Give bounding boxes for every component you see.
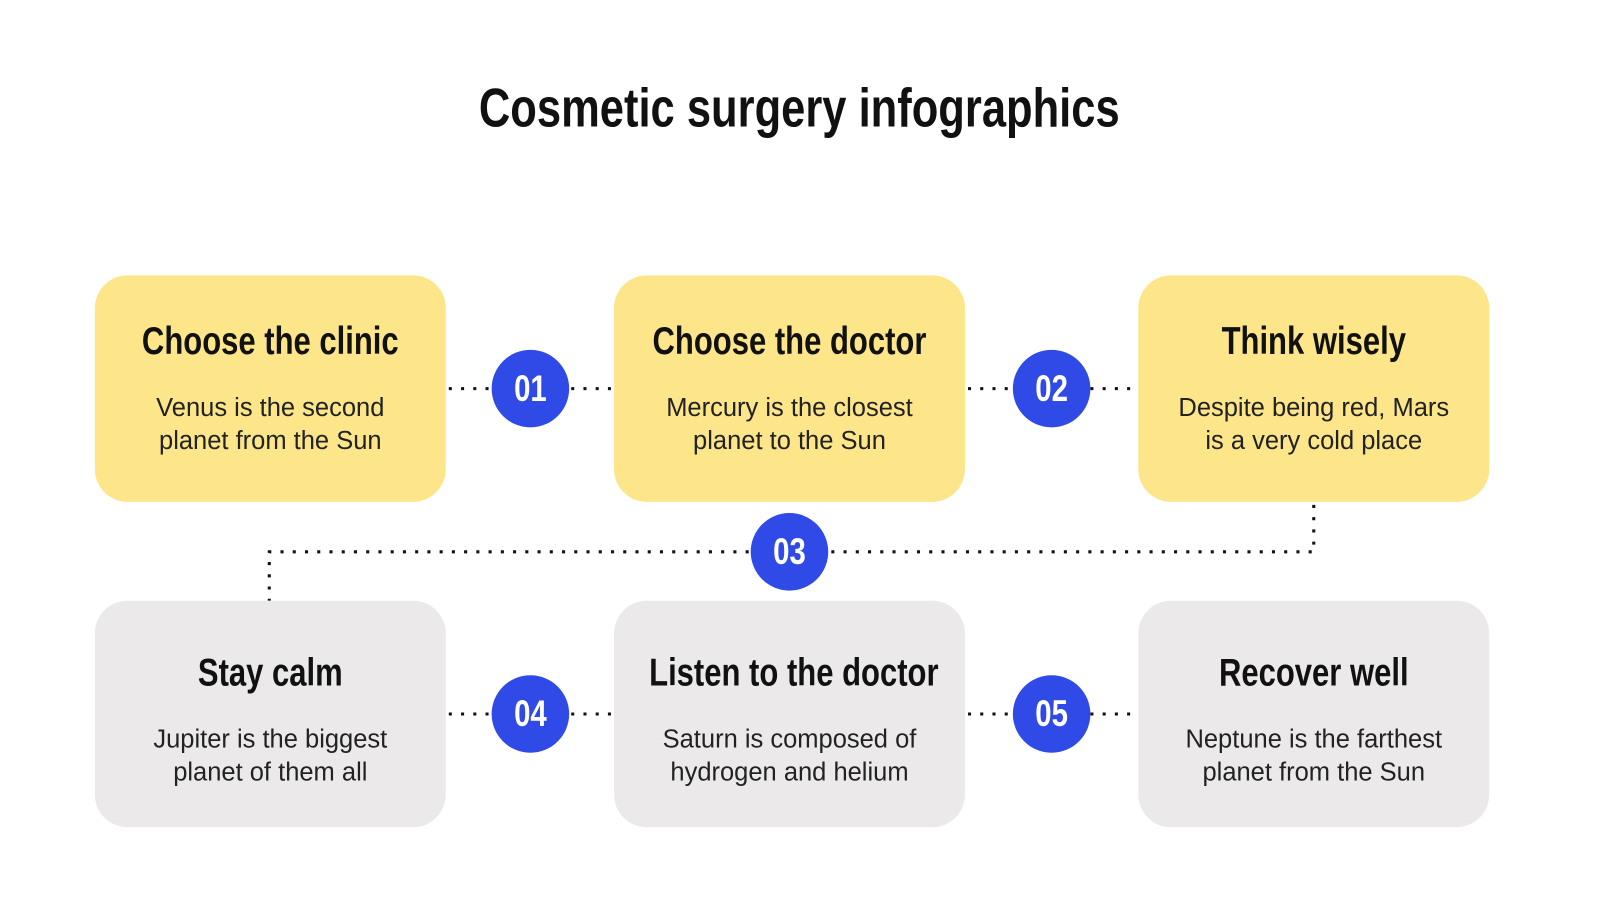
panel: think wisely: Think wisely bbox=[1222, 320, 1406, 363]
panel: choose the doctor bbox=[614, 275, 965, 502]
circle 02: 02 bbox=[1035, 367, 1068, 409]
panel: choose the clinic: planet from the Sun bbox=[159, 426, 382, 455]
panel: recover well bbox=[1138, 601, 1489, 827]
circle 04: 04 bbox=[514, 693, 547, 734]
circle 02 bbox=[1013, 350, 1090, 427]
panel: listen to the doctor: Listen to the doctor bbox=[649, 652, 939, 695]
circle 05: 05 bbox=[1035, 693, 1068, 734]
panel: stay calm bbox=[95, 601, 446, 827]
panel: choose the doctor: Choose the doctor bbox=[653, 320, 926, 363]
panel: stay calm: Jupiter is the biggest bbox=[153, 725, 387, 754]
circle 03 bbox=[751, 513, 828, 591]
panel: recover well: planet from the Sun bbox=[1202, 758, 1425, 786]
panel: listen to the doctor: Saturn is composed of bbox=[663, 725, 916, 754]
panel: choose the clinic bbox=[95, 275, 446, 502]
panel: choose the clinic: Venus is the second bbox=[156, 394, 384, 422]
panel: stay calm: Stay calm bbox=[198, 652, 343, 695]
panel: listen to the doctor: hydrogen and helium bbox=[670, 758, 909, 786]
panel: listen to the doctor bbox=[614, 601, 965, 827]
circle 05 bbox=[1013, 675, 1090, 753]
panel: think wisely bbox=[1138, 275, 1489, 502]
circle 04 bbox=[492, 675, 569, 753]
panel: stay calm: planet of them all bbox=[173, 758, 367, 786]
panel: recover well: Neptune is the farthest bbox=[1185, 725, 1442, 754]
circle 03: 03 bbox=[773, 530, 806, 572]
panel: think wisely: is a very cold place bbox=[1205, 426, 1422, 455]
circle 01 bbox=[492, 350, 569, 427]
panel: choose the clinic: Choose the clinic bbox=[142, 320, 399, 363]
title: Cosmetic surgery infographics bbox=[479, 78, 1120, 139]
circle 01: 01 bbox=[514, 367, 547, 409]
panel: choose the doctor: planet to the Sun bbox=[693, 426, 886, 455]
panel: choose the doctor: Mercury is the closest bbox=[666, 394, 913, 422]
panel: recover well: Recover well bbox=[1219, 652, 1409, 695]
panel: think wisely: Despite being red, Mars bbox=[1178, 394, 1449, 422]
